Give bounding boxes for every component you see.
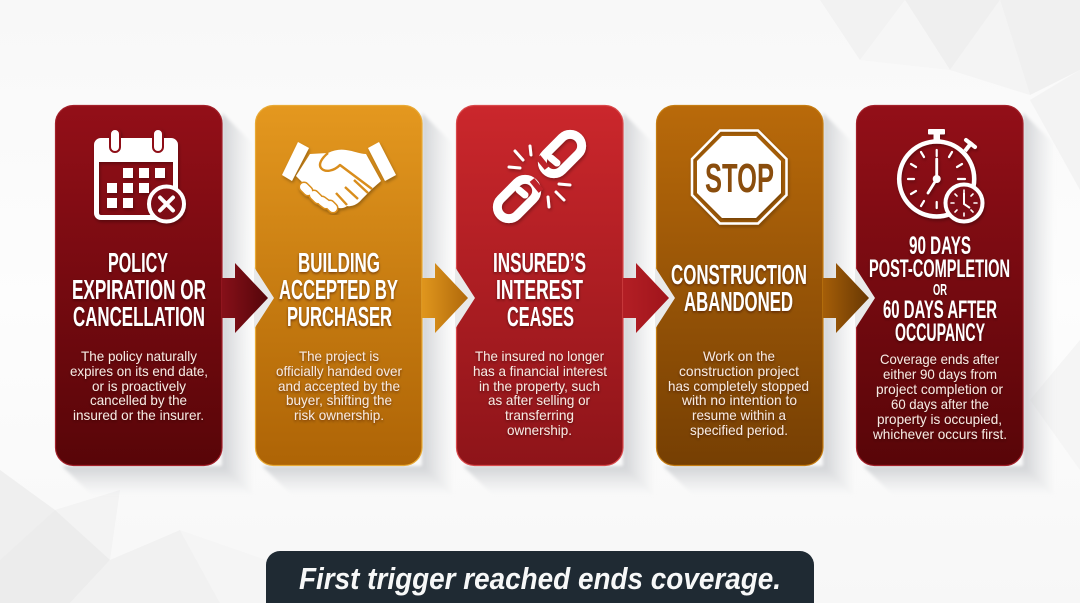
description: insured or the insurer.: [73, 407, 204, 423]
callout: bottom banner: [266, 551, 814, 603]
heading: INTEREST: [496, 274, 583, 305]
heading: 90 DAYS: [909, 232, 971, 260]
icon: broken chain link: [493, 130, 586, 223]
description: The insured no longer: [475, 348, 604, 364]
description: [70, 348, 208, 423]
heading: OCCUPANCY: [895, 319, 985, 347]
heading: [72, 247, 206, 332]
heading: [671, 259, 807, 317]
description: buyer, shifting the: [286, 392, 392, 408]
description: has completely stopped: [668, 378, 809, 394]
icon: calendar with cross: [94, 129, 184, 222]
heading: OR: [933, 282, 947, 299]
icon: stop sign: [692, 130, 786, 224]
description: cancelled by the: [90, 392, 187, 408]
description: The project is: [299, 348, 379, 364]
description: resume within a: [692, 407, 786, 423]
heading: ACCEPTED BY: [279, 274, 398, 305]
heading: PURCHASER: [287, 301, 392, 332]
description: [872, 351, 1007, 442]
heading: 60 DAYS AFTER: [883, 296, 997, 324]
description: officially handed over: [276, 363, 402, 379]
card shadows: [62, 113, 1055, 497]
description: construction project: [679, 363, 799, 379]
description: or is proactively: [92, 378, 186, 394]
description: specified period.: [690, 422, 788, 438]
arrow 4: [823, 263, 875, 333]
heading: CEASES: [507, 301, 574, 332]
heading: CANCELLATION: [73, 301, 205, 332]
description: The policy naturally: [81, 348, 197, 364]
description: has a financial interest: [473, 363, 607, 379]
description: Coverage ends after: [880, 351, 999, 367]
description: either 90 days from: [883, 366, 997, 382]
panel: insured's interest ceases: [456, 106, 623, 466]
panel: building accepted by purchaser: [256, 106, 422, 466]
arrow 3: [623, 263, 675, 333]
description: ownership.: [507, 422, 572, 438]
description: with no intention to: [681, 392, 797, 408]
heading: POLICY: [108, 247, 168, 278]
description: property is occupied,: [877, 411, 1002, 427]
description: expires on its end date,: [70, 363, 208, 379]
icon: handshake: [282, 142, 396, 208]
heading: EXPIRATION OR: [72, 274, 206, 305]
description: [276, 348, 402, 423]
heading: INSURED’S: [493, 247, 586, 278]
panel: 90 days post-completion or 60 days after occupancy: [856, 106, 1023, 466]
heading: BUILDING: [298, 247, 380, 278]
description: as after selling or: [488, 392, 590, 408]
description: transferring: [505, 407, 574, 423]
description: risk ownership.: [294, 407, 384, 423]
heading: [493, 247, 586, 332]
heading: CONSTRUCTION: [671, 259, 807, 290]
icon: stopwatch with small clock: [899, 129, 982, 222]
description: [473, 348, 607, 438]
heading: [279, 247, 398, 332]
description: and accepted by the: [278, 378, 400, 394]
panel: policy expiration or cancellation: [56, 106, 222, 466]
description: 60 days after the: [891, 396, 989, 412]
arrow 1: [222, 263, 274, 333]
description: project completion or: [876, 381, 1003, 397]
icon: stop sign: STOP: [705, 155, 774, 201]
heading: [869, 232, 1010, 347]
description: [668, 348, 809, 438]
panel: construction abandoned: [656, 106, 823, 466]
arrow 2: [422, 263, 475, 333]
description: in the property, such: [479, 378, 600, 394]
callout: bottom banner: First trigger reached ends coverage.: [299, 561, 781, 596]
description: whichever occurs first.: [872, 426, 1007, 442]
heading: ABANDONED: [684, 286, 793, 317]
description: Work on the: [703, 348, 775, 364]
